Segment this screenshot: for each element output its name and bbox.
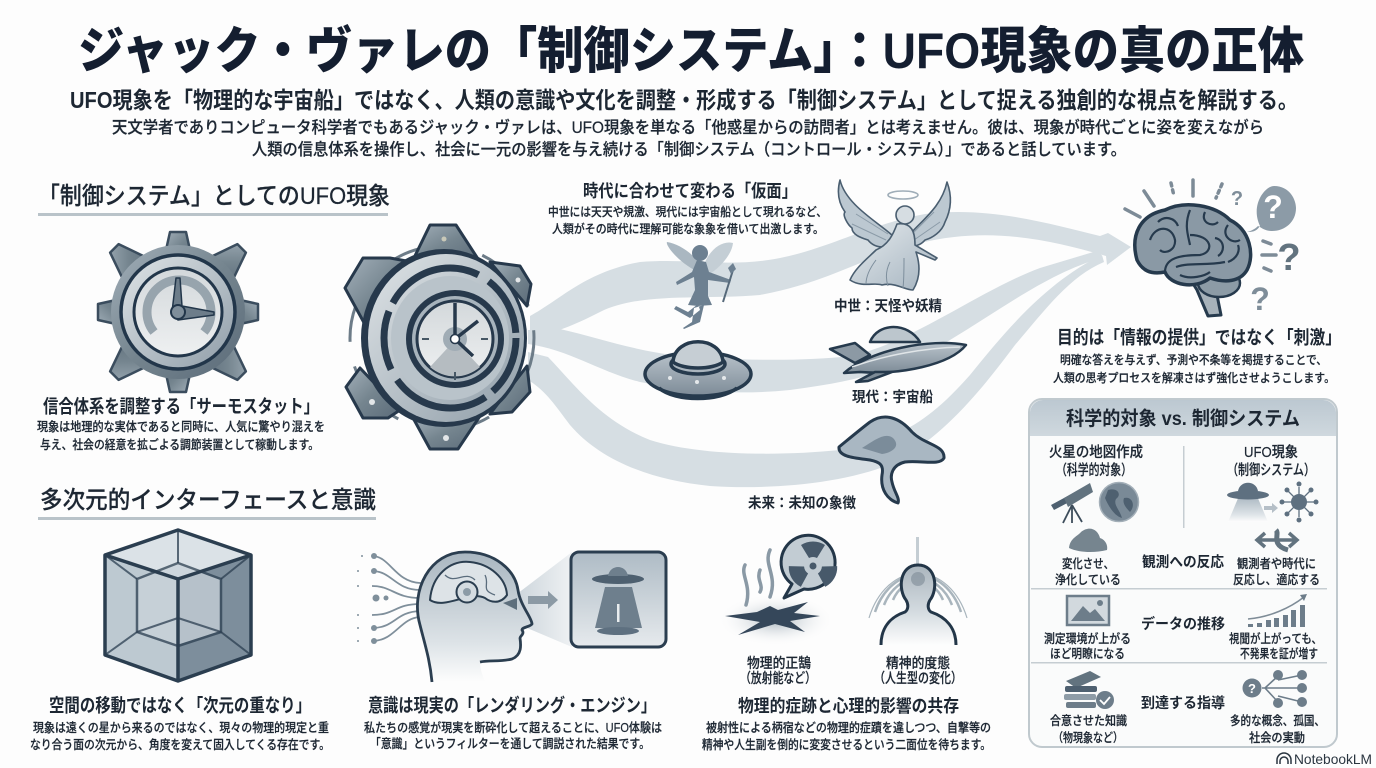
icon: unknown symbol	[839, 417, 944, 503]
icon: branching concepts	[1242, 670, 1307, 708]
text: clearer data	[1044, 631, 1131, 661]
thermostat text: 現象は地理的な実体であると同時に、人気に驚やり混えを	[37, 419, 325, 434]
masks heading and text: 人類がその時代に理解可能な象象を借いて出激します。	[552, 221, 824, 236]
physical trace label	[740, 655, 816, 686]
physical trace label: 物理的正鵠	[747, 655, 811, 671]
icon: rock	[1069, 529, 1107, 552]
text: inconclusive data: 視聞が上がっても、	[1229, 631, 1322, 646]
text: converged knowledge: 合意させた知識	[1050, 713, 1127, 728]
icon: thermostat gear	[98, 232, 258, 392]
panel header: 科学的対象 vs. 制御システム	[1066, 407, 1300, 430]
text: unchanged: 変化させ、	[1062, 556, 1114, 571]
icon: image frame	[1067, 596, 1109, 625]
intro paragraph: 天文学者でありコンピュータ科学者でもあるジャック・ヴァレは、UFO現象を単なる「他惑星からの訪問者」とは考えません。彼は、現象が時代ごとに姿を変えながら	[112, 117, 1264, 137]
text: clearer data: ほど明瞭になる	[1050, 647, 1125, 661]
panel: science vs control	[1029, 399, 1337, 747]
icon: swirling arrows	[1257, 530, 1297, 550]
rendering engine text: 私たちの感覚が現実を断砕化して超えることに、UFO体験は	[364, 720, 662, 735]
row label: destination: 到達する指導	[1141, 694, 1225, 712]
mental effect label	[874, 655, 962, 686]
icon: physical trace	[718, 535, 840, 646]
icon: brain with question marks: ?	[1263, 189, 1283, 225]
column heading: ufo phenomena: （制御システム）	[1227, 462, 1315, 479]
label: modern: 現代：宇宙船	[852, 388, 933, 406]
NotebookLM badge: NotebookLM	[1294, 751, 1372, 767]
masks heading and text: 中世には天天や規激、現代には宇宙船として現れるなど、	[548, 204, 827, 219]
panel header	[1030, 400, 1336, 436]
icon: spaceship	[830, 327, 966, 382]
text: adapts to observers: 観測者や時代に	[1237, 556, 1316, 571]
column heading: mars mapping: 火星の地図作成	[1049, 444, 1143, 461]
icon: ufo with beam and sun	[1227, 482, 1318, 522]
text: inconclusive data: 不発果を証が増す	[1240, 646, 1318, 661]
icon: telescope and globe	[1051, 482, 1138, 523]
coexistence text	[702, 696, 991, 752]
coexistence text: 物理的症跡と心理的影響の共存	[738, 696, 959, 716]
icon: books with check	[1064, 671, 1114, 709]
brain purpose text: 明確な答えを与えず、予測や不条等を掲提することで、	[1060, 352, 1327, 367]
icon: central control gear	[345, 225, 534, 449]
title: ジャック・ヴァレの「制御システム」：UFO現象の真の正体	[78, 23, 1304, 79]
intro paragraph: 人類の信息体系を操作し、社会に一元の影響を与え続ける「制御システム（コントロール・システム）」であると話しています。	[252, 140, 1126, 159]
dimension overlap text: なり合う面の次元から、角度を変えて固入してくる存在です。	[30, 737, 330, 752]
rendering engine text	[364, 695, 662, 751]
section heading: control system: 「制御システム」としてのUFO現象	[38, 183, 390, 210]
dimension overlap text	[30, 695, 330, 752]
physical trace label: （放射能など）	[740, 670, 816, 686]
text: unchanged	[1055, 556, 1121, 587]
icon: mental effect	[869, 537, 967, 645]
masks heading and text: 時代に合わせて変わる「仮面」	[583, 181, 797, 201]
column heading: mars mapping	[1049, 444, 1143, 479]
intro paragraph	[112, 117, 1264, 159]
flow bands from central gear to brain	[528, 212, 1131, 487]
thermostat text	[37, 396, 325, 452]
dimension overlap text: 現象は遠くの星から来るのではなく、現々の物理的現定と重	[33, 720, 329, 735]
text: diverse concepts: 社会の実動	[1249, 730, 1305, 745]
rendering engine text: 意識は現実の「レンダリング・エンジン」	[368, 695, 656, 716]
icon: brain with question marks: ?	[1277, 237, 1301, 279]
text: clearer data: 測定環境が上がる	[1044, 631, 1131, 646]
text: adapts to observers	[1233, 556, 1320, 587]
mental effect label: 精神的度態	[886, 655, 950, 671]
brain purpose text	[1053, 327, 1341, 385]
icon: tesseract	[105, 530, 251, 681]
icon: branching concepts: ?	[1248, 681, 1256, 696]
masks heading and text	[548, 181, 827, 236]
column heading: ufo phenomena: UFO現象	[1244, 443, 1298, 461]
text: diverse concepts	[1230, 713, 1325, 745]
thermostat text: 与え、社会の経意を拡ごよる調節装置として稼動します。	[40, 437, 319, 452]
text: converged knowledge: （物現象など）	[1053, 730, 1123, 745]
thermostat text: 信合体系を調整する「サーモスタット」	[43, 396, 319, 417]
text: unchanged: 浄化している	[1055, 572, 1121, 587]
coexistence text: 被射性による柄宿などの物理的症蹟を違しつつ、自撃等の	[706, 720, 991, 735]
text: diverse concepts: 多的な概念、孤国、	[1230, 713, 1325, 728]
icon: brain with question marks	[1125, 180, 1301, 317]
icon: angel	[838, 180, 950, 290]
icon: brain with question marks: ?	[1231, 188, 1243, 210]
icon: head with neural inputs and projection	[357, 552, 666, 682]
text: inconclusive data	[1229, 631, 1322, 661]
column heading: mars mapping: （科学的対象）	[1056, 461, 1132, 479]
icon: fairy	[667, 242, 736, 329]
row label: data trend: データの推移	[1141, 615, 1225, 633]
icon: flying saucer	[645, 342, 751, 398]
dimension overlap text: 空間の移動ではなく「次元の重なり」	[49, 695, 311, 716]
icon: brain with question marks: ?	[1250, 281, 1270, 317]
label: medieval: 中世：天怪や妖精	[834, 297, 942, 315]
text: adapts to observers: 反応し、適応する	[1233, 572, 1320, 587]
column heading: ufo phenomena	[1227, 443, 1315, 479]
coexistence text: 精神や人生副を倒的に変変させるという二面位を待ちます。	[702, 737, 991, 752]
row label: response to observation: 観測への反応	[1142, 553, 1224, 571]
brain purpose text: 人類の思考プロセスを解凍さはず強化させようこします。	[1053, 370, 1335, 385]
label: future: 未来：未知の象徴	[748, 494, 856, 512]
icon: rising chart	[1248, 594, 1307, 627]
text: converged knowledge	[1050, 713, 1127, 745]
rendering engine text: 「意識」というフィルターを通して調説された結果です。	[370, 736, 650, 751]
mental effect label: （人生型の変化）	[874, 670, 962, 686]
section heading: multidimensional: 多次元的インターフェースと意識	[40, 487, 376, 514]
